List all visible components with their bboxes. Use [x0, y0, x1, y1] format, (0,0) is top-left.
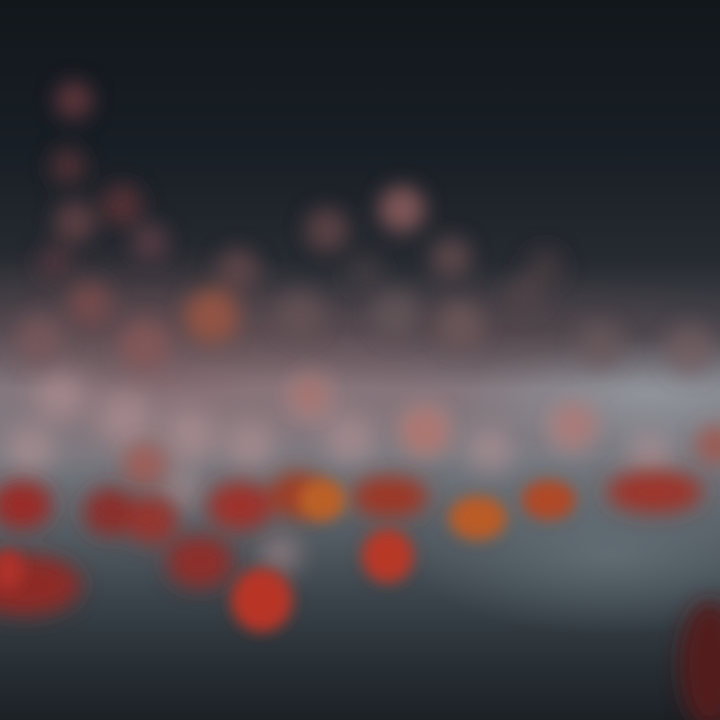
haze: pale bands [0, 240, 720, 635]
bright sphere cores [0, 479, 576, 632]
pale pink sphere haze [6, 371, 672, 574]
foreground red and orange spheres [0, 471, 720, 720]
distant dim spheres [16, 81, 720, 487]
